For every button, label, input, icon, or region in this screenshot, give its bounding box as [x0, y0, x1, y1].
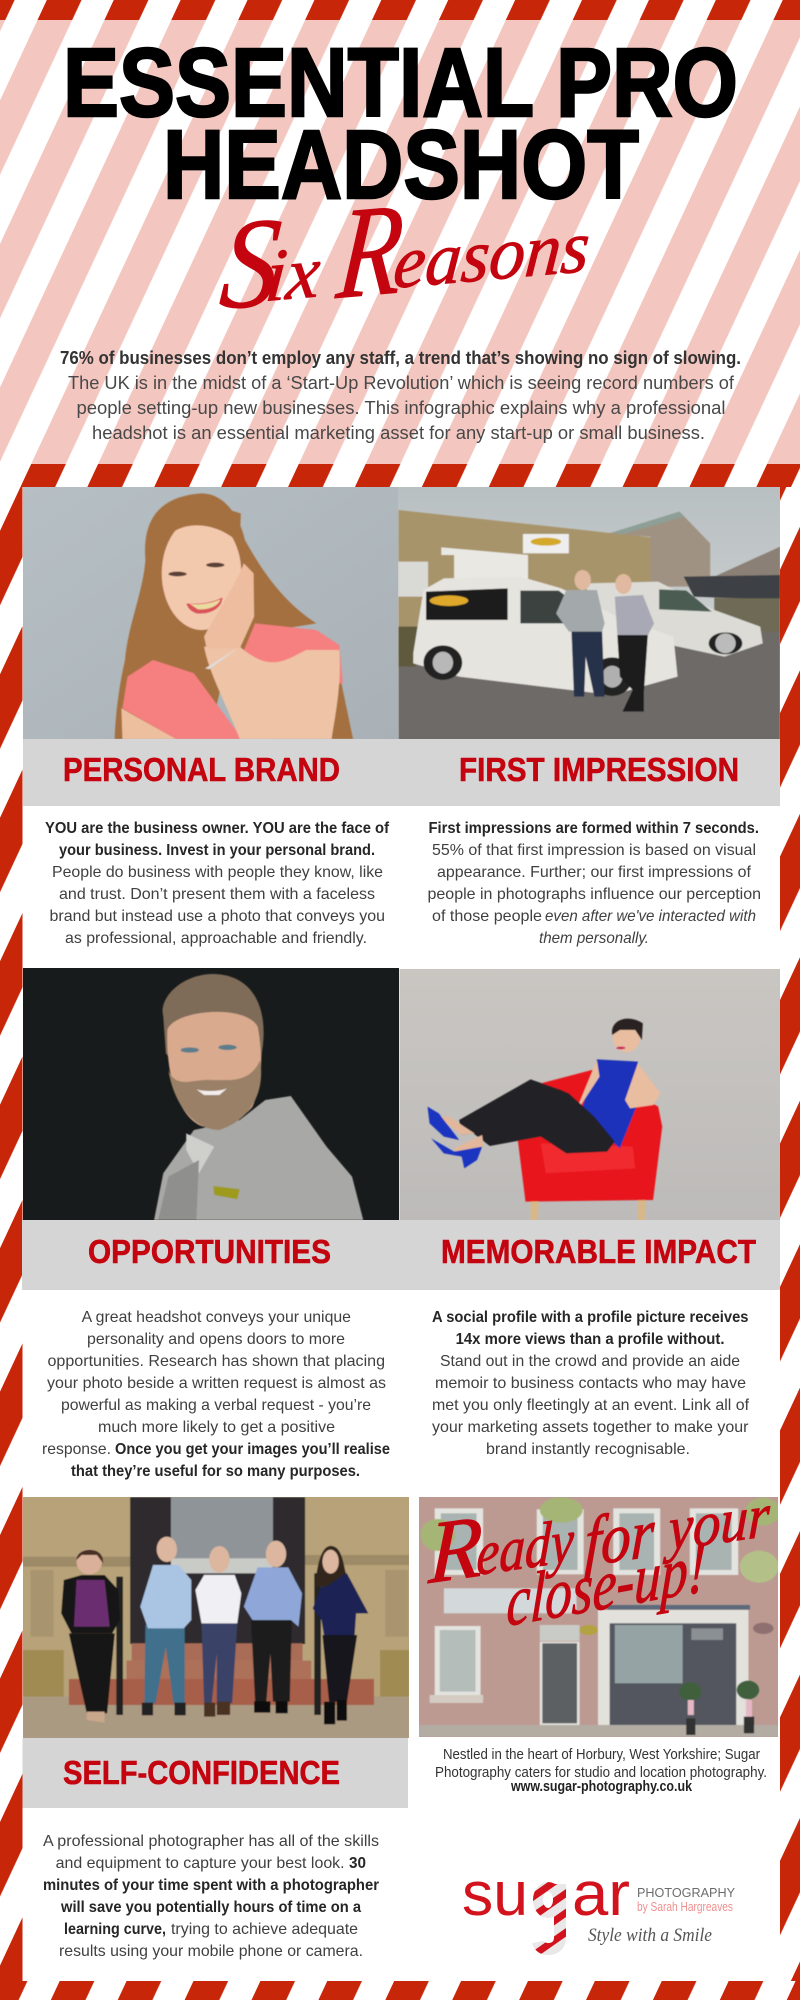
photo headline: Ready for your close-up: your	[662, 1479, 772, 1565]
photo headline: Ready for your close-up: R	[426, 1497, 484, 1603]
text: first impression: appearance. Further; our first impressions of	[437, 864, 752, 881]
text: memorable impact: Stand out in the crowd and provide an aide	[440, 1353, 740, 1370]
caption	[435, 1747, 767, 1795]
text: first impression: of those people	[432, 908, 542, 925]
text: personal brand: as professional, approachable and friendly.	[65, 930, 367, 947]
text: first impression	[428, 820, 761, 947]
text: first impression: 55% of that first impression is based on visual	[432, 842, 756, 859]
text: memorable impact: A social profile with a profile picture receives	[432, 1309, 749, 1326]
text: opportunities: Once you get your images you’ll realise	[115, 1441, 390, 1458]
photo headline: Ready for your close-up: close-up!	[505, 1528, 707, 1642]
heading bar	[22, 1220, 780, 1290]
text: first impression: even after we've interacted with	[545, 908, 756, 925]
text: memorable impact: met you only fleetingly at an event. Link all of	[432, 1397, 750, 1414]
text: self-confidence: will save you potentially hours of time on a	[60, 1899, 361, 1916]
photo: woman in red chair	[400, 969, 780, 1220]
photo headline: Ready for your close-up: eady	[476, 1505, 575, 1589]
logo: Sugar Photography	[462, 1860, 735, 1949]
title	[63, 28, 738, 219]
logo: Sugar Photography: Style with a Smile	[588, 1925, 712, 1946]
subtitle: Six Reasons: ix	[263, 231, 324, 318]
text: self-confidence: results using your mobile phone or camera.	[59, 1943, 363, 1960]
text: personal brand: YOU are the business owner. YOU are the face of	[45, 820, 390, 837]
intro text: people setting-up new businesses. This infographic explains why a professional	[76, 398, 725, 418]
panel: opportunities and memorable impact	[22, 968, 780, 1480]
photo: group of five on steps	[23, 1497, 409, 1738]
logo: Sugar Photography: ar	[572, 1860, 630, 1929]
text: personal brand	[45, 820, 390, 947]
intro text: The UK is in the midst of a ‘Start-Up Revolution’ which is seeing record numbers of	[68, 373, 735, 393]
subtitle: Six Reasons: S	[216, 190, 286, 336]
text: self-confidence	[43, 1833, 379, 1960]
text: opportunities: that they’re useful for so many purposes.	[71, 1463, 360, 1480]
subtitle: Six Reasons: R	[332, 176, 409, 327]
heading bar: OPPORTUNITIES	[88, 1233, 331, 1270]
text: first impression: people in photographs influence our perception	[428, 886, 761, 903]
intro text	[60, 348, 741, 443]
logo: Sugar Photography: by Sarah Hargreaves	[637, 1899, 733, 1914]
photo headline: Ready for your close-up: for	[583, 1494, 656, 1582]
icon: candy cane g	[538, 1884, 560, 1949]
text: opportunities	[42, 1309, 390, 1480]
text: self-confidence: and equipment to capture your best look.	[56, 1855, 345, 1872]
text: memorable impact	[432, 1309, 750, 1458]
caption: Nestled in the heart of Horbury, West Yorkshire; Sugar	[443, 1747, 760, 1763]
text: opportunities: your photo beside a written request is almost as	[47, 1375, 386, 1392]
logo: Sugar Photography: PHOTOGRAPHY	[637, 1885, 735, 1900]
text: personal brand: People do business with people they know, like	[52, 864, 383, 881]
text: self-confidence: minutes of your time spent with a photographer	[43, 1877, 379, 1894]
text: opportunities: opportunities. Research has shown that placing	[48, 1353, 385, 1370]
text: self-confidence: A professional photographer has all of the skills	[43, 1833, 379, 1850]
photo headline: Ready for your close-up	[426, 1479, 772, 1642]
subtitle: Six Reasons	[216, 176, 593, 336]
title: HEADSHOT	[163, 110, 639, 219]
panel: self-confidence	[22, 1497, 409, 1960]
intro text: headshot is an essential marketing asset for any start-up or small business.	[92, 423, 705, 443]
subtitle: Six Reasons: easons	[391, 206, 593, 305]
logo: Sugar Photography: su	[462, 1860, 528, 1929]
intro text: 76% of businesses don’t employ any staff, a trend that’s showing no sign of slowing.	[60, 348, 741, 368]
caption: www.sugar-photography.co.uk	[510, 1779, 693, 1795]
heading bar: MEMORABLE IMPACT	[441, 1233, 756, 1270]
text: first impression: them personally.	[539, 930, 649, 947]
text: opportunities: personality and opens doors to more	[87, 1331, 345, 1348]
panel: personal brand	[23, 487, 780, 947]
text: memorable impact: your marketing assets together to make your	[432, 1419, 749, 1436]
photo: studio shopfront	[418, 1497, 780, 1737]
text: personal brand: and trust. Don’t present them with a faceless	[59, 886, 375, 903]
heading bar: PERSONAL BRAND	[63, 751, 340, 788]
photo: smiling girl	[23, 487, 398, 739]
heading bar	[23, 739, 780, 806]
caption: Photography caters for studio and location photography.	[435, 1765, 767, 1781]
text: opportunities: A great headshot conveys your unique	[82, 1309, 351, 1326]
text: personal brand: your business. Invest in your personal brand.	[59, 842, 375, 859]
text: memorable impact: 14x more views than a profile without.	[456, 1331, 724, 1348]
text: personal brand: brand but instead use a photo that conveys you	[50, 908, 385, 925]
photo: men and vans	[398, 487, 780, 740]
panel: ready for your close-up	[418, 1479, 780, 1949]
text: first impression: First impressions are formed within 7 seconds.	[428, 820, 759, 837]
text: memorable impact: brand instantly recognisable.	[486, 1441, 690, 1458]
heading bar: FIRST IMPRESSION	[459, 751, 739, 788]
heading bar	[22, 1738, 408, 1808]
text: self-confidence: 30	[349, 1855, 366, 1872]
text: self-confidence: learning curve,	[64, 1921, 166, 1938]
text: opportunities: powerful as making a verbal request - you’re	[61, 1397, 371, 1414]
text: opportunities: response.	[42, 1441, 111, 1458]
text: self-confidence: trying to achieve adequate	[171, 1921, 358, 1938]
heading bar: SELF-CONFIDENCE	[63, 1754, 340, 1791]
text: opportunities: much more likely to get a positive	[98, 1419, 335, 1436]
photo: man on black	[23, 968, 399, 1220]
text: memorable impact: memoir to business contacts who may have	[435, 1375, 746, 1392]
